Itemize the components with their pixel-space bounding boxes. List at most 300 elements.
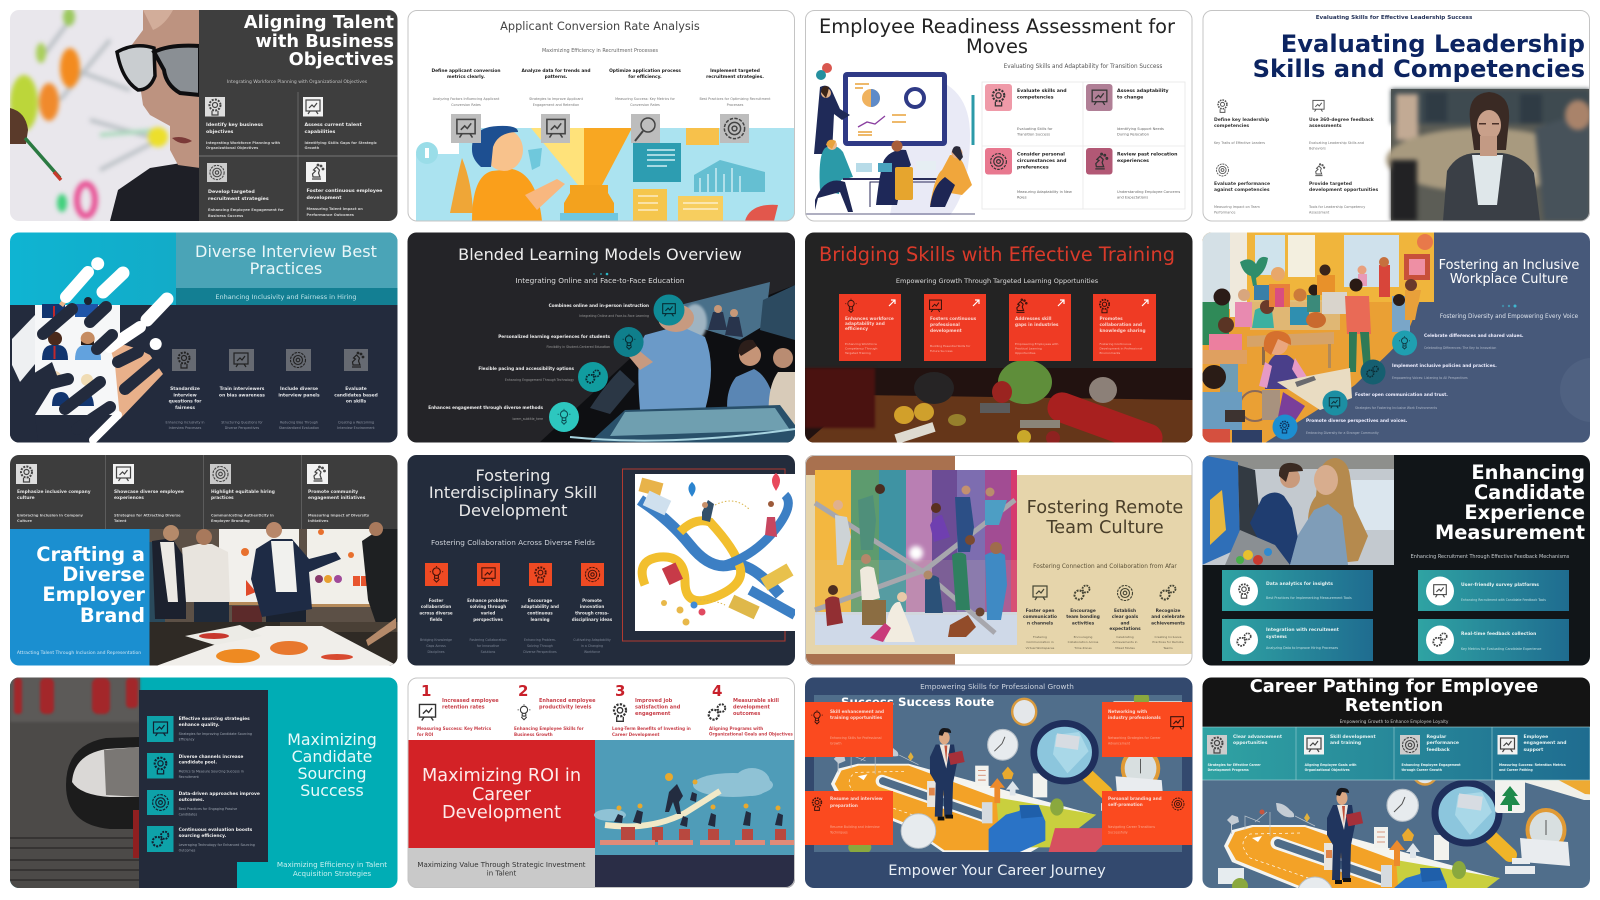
title: with Business: [255, 31, 394, 52]
illustration: winding path with travellers: [635, 474, 795, 631]
panel: Aligning Talent with Business Objectives: [10, 8, 398, 221]
column 2: [1304, 734, 1376, 772]
column 3: [521, 563, 559, 654]
subtitle: Empowering Growth to Enhance Employee Loyalty: [1340, 719, 1449, 725]
panel: Fostering Remote Team Culture: [804, 455, 1193, 666]
title: [287, 730, 377, 800]
card: workforce adaptability: Targeted Training: [844, 351, 871, 355]
column 2: Showcase diverse employee: [114, 489, 184, 495]
column 3: learning: [530, 617, 550, 622]
card: resume: preparation: [830, 803, 858, 808]
red frame: [622, 469, 785, 641]
title: Employee Readiness Assessment for: [819, 15, 1175, 38]
metric 1: Increased employee: [442, 698, 499, 704]
metric 1: Measuring Success: Key Metrics: [417, 726, 492, 731]
card: personal branding: Personal branding and: [1108, 796, 1162, 801]
item: diverse channels: [147, 753, 244, 779]
metric 1: 1: [421, 682, 431, 700]
subtitle: Empowering Growth Through Targeted Learning Opportunities: [896, 277, 1099, 285]
icon: charts: [541, 114, 570, 143]
item: sourcing strategies: Strategies for Improving Candidate Sourcing: [179, 732, 252, 736]
card: collaboration: [1093, 294, 1156, 361]
metric 1: for ROI: [417, 732, 434, 737]
title: Interdisciplinary Skill: [429, 483, 597, 502]
column 4: Workforce: [584, 650, 600, 654]
item: employee development: Foster continuous employee: [306, 188, 382, 194]
subtitle panel: in Talent: [487, 870, 516, 878]
card: collaboration: knowledge sharing: [1100, 328, 1146, 334]
title: Maximizing: [287, 730, 377, 749]
column 2: Time Zones: [1073, 646, 1092, 650]
icon: chess knight: [306, 162, 326, 182]
card: workforce adaptability: efficiency: [845, 326, 868, 332]
item: open communication: Foster open communication and trust.: [1355, 392, 1448, 398]
item: identify objectives: Identify key business: [206, 122, 263, 128]
item: diverse perspectives: Promote diverse perspectives and voices.: [1306, 418, 1408, 424]
item: celebrate differences: Celebrate differences and shared values.: [1424, 333, 1524, 339]
heading: Success Route: Success Route: [898, 695, 994, 709]
card: personal branding: Navigating Career Transitions: [1108, 825, 1155, 829]
candidates top row: [42, 296, 98, 318]
column 3: practices: [211, 495, 234, 501]
item: recruitment strategies: [207, 163, 284, 218]
icon: teal badge: [654, 294, 684, 326]
column 4: achievements: [1151, 620, 1185, 626]
column 3: feedback: [1426, 747, 1451, 753]
title: [1253, 30, 1585, 83]
metric 4: Measurable skill: [733, 698, 779, 704]
candidates bottom row: [49, 371, 94, 406]
column 2: Aligning Employee Goals with: [1305, 763, 1356, 767]
list panel: [139, 690, 268, 889]
column 2: Talent: [114, 519, 127, 523]
teal band: [1202, 727, 1590, 780]
item: recruitment strategies: recruitment strategies: [208, 196, 269, 202]
title panel: [407, 740, 595, 848]
column 4: Promote community: [308, 489, 358, 495]
title: [244, 12, 394, 70]
title: [1439, 258, 1579, 287]
item: 360 feedback: [1309, 100, 1375, 150]
column 3: clear goals: [1112, 614, 1139, 620]
item: data-driven: outcomes.: [179, 797, 205, 803]
title: Workplace Culture: [1450, 272, 1568, 287]
column 3: adaptability and: [521, 604, 559, 609]
illustration: team at presentation board: [805, 63, 975, 215]
photo: fitness equipment: [805, 360, 1193, 458]
title: Blended Learning Models Overview: [458, 245, 742, 264]
item: identify objectives: [205, 97, 281, 150]
item: development opportunities: Tools for Leadership Competency: [1308, 205, 1365, 209]
item: diverse perspectives: [1272, 414, 1408, 440]
item: development opportunities: Assessment: [1309, 210, 1330, 214]
cell: personal circumstances: circumstances and: [1017, 158, 1066, 164]
step 3: Optimize application process: [609, 68, 681, 74]
assessment grid: [982, 82, 1185, 209]
practice 2: [219, 349, 265, 430]
item: evaluate performance: Measuring Impact on Team: [1214, 205, 1260, 209]
item: flexible pacing: [478, 362, 608, 392]
column 2: activities: [1072, 620, 1095, 626]
cell: assess adaptability: to change: [1117, 94, 1143, 100]
cell: personal circumstances: [985, 148, 1072, 200]
practice 2: Train interviewers: [220, 386, 265, 392]
column 3: Celebrating: [1116, 635, 1134, 639]
step 3: for efficiency.: [628, 74, 662, 80]
cell: evaluate skills: Transition Success: [1016, 132, 1050, 136]
title panel: [10, 529, 150, 666]
title: Brand: [80, 604, 145, 627]
step 2: Engagement and Retention: [533, 103, 579, 107]
column 1: [419, 563, 453, 654]
title: Aligning Talent: [244, 12, 394, 33]
item: combined instruction: Combines online and in-person instruction: [549, 303, 649, 308]
column 3: expectations: [1109, 626, 1141, 632]
column 1: communicatio: [1023, 614, 1057, 620]
icon: strategy board: [451, 114, 481, 143]
metric 3: engagement: [635, 711, 671, 717]
column 1: Virtual Workspaces: [1026, 646, 1055, 650]
item: personalized experiences: Personalized learning experiences for students: [498, 334, 610, 339]
column 3: Regular: [1426, 734, 1447, 740]
column 1: [16, 464, 91, 523]
card: personal branding: self-promotion: [1108, 802, 1143, 807]
item: continuous evaluation: Outcomes: [179, 848, 196, 852]
icon: bulb: [845, 299, 857, 312]
item: recruitment strategies: Business Success: [208, 214, 243, 218]
icon: chess knight: [1095, 153, 1108, 169]
item: data-driven: Candidates: [179, 812, 197, 816]
cell: past relocation: Understanding Employee Concerns: [1117, 190, 1180, 194]
subtitle: Fostering Diversity and Empowering Every Voice: [1440, 314, 1579, 320]
column 1: [1207, 734, 1283, 772]
item: flexible pacing: Flexible pacing and accessibility options: [478, 366, 574, 371]
item: open communication: [1322, 390, 1448, 416]
illustration: career road scene: [1202, 780, 1590, 888]
card: real-time feedback: [1418, 619, 1569, 661]
item: celebrate differences: [1392, 330, 1524, 356]
card: recruitment integration: systems: [1266, 634, 1287, 640]
icon: gear head: [172, 349, 196, 371]
column 2: Enhance problem-: [467, 598, 509, 603]
subtitle: Acquisition Strategies: [293, 869, 371, 878]
card: skill gaps: Empowering Employees with: [1015, 342, 1059, 346]
card: skill enhancement: Enhancing Skills for Professional: [830, 736, 882, 740]
card: recruitment integration: [1222, 619, 1373, 661]
column 1: Foster open: [1026, 608, 1054, 614]
column 4: Measuring Impact of Diversity: [308, 514, 370, 518]
column 1: Bridging Knowledge: [420, 638, 452, 642]
practice 4: on skills: [346, 399, 367, 405]
icon: gears: [709, 704, 725, 720]
photo: magnifier on dark wood with red pawns: [10, 677, 140, 889]
icon: gears: [1074, 586, 1090, 600]
step 4: Implement targeted: [710, 68, 760, 74]
item: sourcing strategies: [147, 716, 252, 742]
column 3: performance: [1426, 740, 1459, 746]
step 2: Analyze data for trends and: [521, 68, 591, 74]
card: skill enhancement: Skill enhancement and: [830, 709, 884, 714]
cell: personal circumstances: Roles: [1017, 196, 1027, 200]
icon: badge hub: [1272, 414, 1298, 440]
card: collaboration: collaboration and: [1100, 322, 1142, 328]
column 2: Strategies for Attracting Diverse: [114, 514, 181, 518]
metric 2: productivity levels: [539, 704, 592, 710]
practice 1: questions for: [169, 399, 202, 405]
column 2: team bonding: [1066, 614, 1100, 620]
eyebrow: Empowering Skills for Professional Growth: [920, 682, 1074, 691]
icon: bulb: [425, 563, 448, 586]
illustration: career road scene: [814, 695, 1182, 852]
column 4: engagement initiatives: [308, 495, 366, 501]
item: engagement: lorem_subtitle_here: [512, 417, 543, 421]
photo: candidates at interactive wall: [1202, 455, 1394, 565]
column 3: [1109, 586, 1141, 650]
title: Development: [459, 501, 567, 520]
column 4: Creating Inclusive: [1155, 635, 1182, 639]
item: leadership competencies: [1214, 100, 1270, 145]
icon: brain: [286, 349, 311, 371]
photo: futuristic classroom: [540, 282, 796, 443]
item: development opportunities: Provide targeted: [1309, 181, 1352, 187]
card: survey platforms: User-friendly survey platforms: [1461, 582, 1539, 588]
column 4: support: [1524, 747, 1544, 753]
candidates middle row: [42, 332, 101, 360]
title: Development: [442, 803, 561, 823]
title: [820, 18, 1175, 54]
dots: [1502, 304, 1516, 308]
cell: evaluate skills: [985, 84, 1067, 136]
metric 4: 4: [712, 682, 722, 700]
column 1: n channels: [1027, 620, 1054, 626]
column 1: fields: [430, 617, 443, 622]
card: networking: [1102, 702, 1192, 757]
title: Career: [472, 785, 532, 805]
item: diverse channels: Diverse channels increase: [179, 754, 243, 760]
icon: gear head: [1218, 100, 1227, 112]
card: skill gaps: Addresses skill: [1015, 316, 1052, 322]
card: resume: [804, 791, 893, 845]
item: 360 feedback: Use 360-degree feedback: [1309, 117, 1375, 123]
column 2: [467, 563, 509, 654]
column 1: across diverse: [419, 610, 453, 616]
panel: Employee Readiness Assessment: [805, 10, 1192, 221]
column 2: [113, 464, 184, 523]
item: data-driven: [147, 790, 260, 816]
card: personal branding: Successfully: [1108, 830, 1128, 834]
card: networking: Advancement: [1108, 742, 1131, 746]
practice 4: Interview Environment: [337, 426, 375, 430]
step 3: Conversion Rates: [630, 103, 660, 107]
title: [1027, 497, 1183, 538]
column 2: and training: [1330, 740, 1361, 746]
card: resume: Techniques: [829, 830, 848, 834]
metric 3: [612, 682, 691, 737]
cell: personal circumstances: preferences: [1017, 164, 1049, 170]
column 4: Measuring Success: Retention Metrics: [1499, 763, 1566, 767]
subtitle: Maximizing Efficiency in Recruitment Processes: [542, 48, 659, 54]
illustration: diagonal stripes with candidates: [10, 257, 167, 443]
column 4: Recognize: [1156, 608, 1180, 614]
cell: past relocation: [1086, 148, 1180, 200]
title: Experience: [1464, 501, 1585, 524]
card: professional development: [924, 294, 986, 361]
icon: gears: [153, 832, 168, 846]
icon: board: [1426, 576, 1454, 606]
column 2: perspectives: [473, 617, 503, 622]
item: leadership competencies: competencies: [1214, 123, 1249, 129]
decorative arc: [1560, 358, 1600, 422]
column 4: disciplinary ideas: [572, 617, 613, 622]
icon: board: [1033, 586, 1047, 600]
card: skill enhancement: Growth: [830, 742, 842, 746]
metric 4: Organizational Goals and Objectives: [709, 732, 793, 736]
step 2: [521, 68, 591, 143]
illustration: climbers on a curved stair: [594, 740, 796, 889]
cell: assess adaptability: [1086, 84, 1169, 136]
card: professional development: professional: [930, 322, 960, 328]
icon: badge bulb: [1392, 330, 1417, 356]
item: development opportunities: development opportunities: [1309, 187, 1378, 193]
metric 3: Long-Term Benefits of Investing in: [612, 726, 691, 731]
icon: board: [1092, 90, 1107, 105]
column 3: [210, 464, 275, 523]
item: data-driven: Best Practices for Engaging Passive: [179, 807, 237, 811]
icon: brain: [1400, 735, 1420, 754]
item: continuous evaluation: sourcing efficiency.: [179, 833, 227, 839]
practice 3: Include diverse: [280, 386, 318, 392]
item: identify objectives: objectives: [206, 129, 234, 135]
column 1: Communication in: [1026, 640, 1054, 644]
card: resume: Resume and interview: [830, 796, 883, 801]
column 3: continuous: [527, 610, 553, 616]
column 1: collaboration: [421, 604, 451, 609]
title: Career Pathing for Employee: [1250, 676, 1538, 697]
title: [1435, 461, 1585, 544]
panel: Career Pathing for Employee Retention: [1195, 676, 1600, 900]
column 2: Organizational Objectives: [1305, 768, 1350, 772]
step 1: metrics clearly.: [447, 74, 485, 80]
column 3: Employer Branding: [211, 519, 250, 523]
column 2: [1066, 586, 1100, 650]
item: 360 feedback: Evaluating Leadership Skills and: [1309, 141, 1364, 145]
subtitle: Integrating Workforce Planning with Organizational Objectives: [227, 79, 368, 85]
icon: bulb: [518, 704, 530, 720]
icon: chess knight: [1016, 299, 1027, 312]
icon: presentation board: [303, 97, 323, 116]
practice 2: Structuring Questions for: [221, 421, 263, 425]
column 1: Foster: [429, 598, 443, 603]
icon: badge nodes: [1360, 360, 1386, 384]
subtitle: Fostering Connection and Collaboration from Afar: [1033, 564, 1177, 570]
step 4: Best Practices for Optimizing Recruitment: [700, 97, 771, 101]
panel: Evaluating Leadership Skills: [1202, 10, 1591, 221]
subtitle: Fostering Collaboration Across Diverse Fields: [431, 538, 595, 547]
title: Team Culture: [1045, 517, 1164, 538]
icon: bulb: [811, 710, 823, 724]
heading: Success Route: [841, 695, 994, 709]
photo: woman in boardroom: [1386, 89, 1591, 221]
practice 3: Reducing Bias Through: [280, 421, 318, 425]
column 4: Employee: [1524, 734, 1548, 740]
heading: Success Route: Success: [841, 695, 894, 709]
column 3: and: [1120, 620, 1130, 626]
card: networking: Networking Strategies for Career: [1108, 736, 1161, 740]
title: Measurement: [1435, 521, 1585, 544]
item: sourcing strategies: enhance quality.: [179, 722, 220, 728]
icon: chess knight: [307, 464, 328, 484]
column 3: Achievements in: [1113, 640, 1138, 644]
column 3: Highlight equitable hiring: [211, 489, 275, 495]
title: Success: [300, 781, 364, 800]
column 4: Teams: [1162, 646, 1173, 650]
arrow: [1142, 300, 1148, 306]
item: recruitment strategies: Develop targeted: [208, 189, 255, 195]
column 2: Solutions: [481, 650, 496, 654]
metric 2: [514, 682, 596, 737]
item: evaluate performance: against competencies: [1214, 187, 1270, 193]
icon: hub: [529, 563, 552, 586]
icon: gears: [1160, 586, 1176, 600]
panel: Empower Your Career Journey: [803, 677, 1193, 889]
icon: gear head: [1207, 735, 1227, 754]
subtitle panel: [407, 848, 595, 889]
card: recruitment integration: Integration with recruitment: [1266, 627, 1340, 633]
column 4: through cross-: [575, 610, 609, 616]
title: Fostering Remote: [1027, 497, 1183, 518]
icon: board: [229, 349, 254, 371]
column 1: Fostering: [1033, 635, 1047, 639]
metric 4: Aligning Programs with: [709, 726, 763, 731]
icon: board: [1304, 735, 1324, 754]
icon: board: [419, 704, 436, 721]
card: skill gaps: Opportunities: [1015, 351, 1036, 355]
metric 3: 3: [615, 682, 625, 700]
column 3: Communicating Authenticity in: [211, 514, 274, 518]
title: Moves: [966, 35, 1028, 58]
cell: assess adaptability: Assess adaptability: [1117, 88, 1169, 94]
illustration: inclusive workplace: [1202, 232, 1434, 443]
column 2: varied: [481, 610, 495, 616]
practice 1: interview: [173, 392, 197, 398]
icon: brain: [207, 163, 227, 182]
title: Candidate: [292, 747, 372, 766]
item: assess capabilities: Assess current talent: [304, 122, 362, 128]
item: diverse channels: candidate pool.: [179, 760, 217, 766]
title: Enhancing: [1471, 461, 1585, 484]
card: professional development: Building Essential Skills for: [930, 344, 971, 348]
panel: Blended Learning Models Overview: [408, 232, 796, 443]
column 4: [1498, 734, 1566, 772]
item: evaluate performance: Performance: [1214, 210, 1236, 214]
title: Diverse: [62, 563, 145, 586]
column 1: Gaps Across: [426, 644, 446, 648]
icon: board: [113, 464, 134, 484]
photo: man with glasses sketching a mind map: [10, 8, 200, 221]
title: Objectives: [289, 49, 394, 70]
hand: [110, 345, 163, 419]
item: 360 feedback: Behaviors: [1309, 146, 1326, 150]
item: assess capabilities: [303, 97, 377, 150]
metric 2: Enhanced employee: [539, 698, 596, 704]
item: continuous evaluation: Leveraging Technology for Enhanced Sourcing: [179, 843, 255, 847]
column 3: [1400, 734, 1461, 772]
item: inclusive policies: Implement inclusive policies and practices.: [1392, 363, 1497, 369]
title: Fostering: [475, 466, 551, 485]
cell: past relocation: Review past relocation: [1117, 152, 1177, 158]
metric 1: retention rates: [442, 704, 485, 710]
column 4: and Career Pathing: [1499, 768, 1533, 772]
